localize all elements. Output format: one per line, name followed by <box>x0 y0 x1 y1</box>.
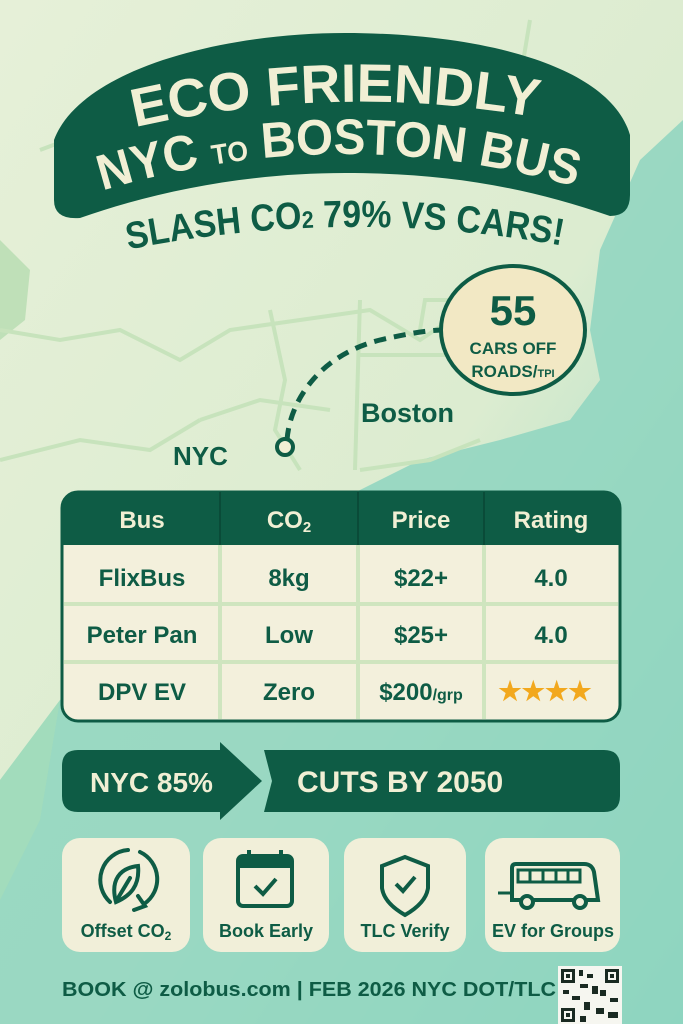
table rows: Zero <box>263 679 315 706</box>
arrow banner: NYC 85% <box>90 767 213 798</box>
title text: ECO FRIENDLY <box>130 64 542 126</box>
card: TLC verify: TLC Verify <box>360 921 450 941</box>
table rows: $22+ <box>394 565 448 592</box>
card: offset CO2: Offset CO <box>81 921 165 941</box>
card: offset CO2: 2 <box>165 929 172 943</box>
card: EV for groups <box>485 838 620 952</box>
arrow banner: CUTS BY 2050 <box>297 766 503 799</box>
title banner <box>54 33 630 218</box>
table rows <box>87 565 568 706</box>
card: TLC verify <box>344 838 466 952</box>
table header: Price <box>392 507 450 534</box>
arrow banner <box>62 742 620 820</box>
table rows: DPV EV <box>98 679 186 706</box>
callout 55 cars <box>441 266 585 394</box>
table header: CO <box>267 507 303 534</box>
comparison table <box>62 492 620 721</box>
table rows: Low <box>265 622 313 649</box>
card: book early <box>203 838 329 952</box>
table rows: 4.0 <box>534 565 568 592</box>
table rows: 8kg <box>268 565 310 592</box>
card: EV for groups: EV for Groups <box>492 921 614 941</box>
QR code <box>558 966 622 1024</box>
label NYC: NYC <box>173 441 228 471</box>
callout 55 cars: 55 <box>490 287 536 334</box>
subtitle: SLASH CO2 79% VS CARS! <box>126 200 564 248</box>
table rows: 4.0 <box>534 622 568 649</box>
table header <box>119 507 588 536</box>
callout 55 cars: CARS OFF <box>470 339 556 358</box>
route dashed line <box>277 330 445 455</box>
table rows: $200/grp <box>379 679 463 706</box>
footer text: BOOK @ zolobus.com | FEB 2026 NYC DOT/TLC <box>62 979 556 1001</box>
table rows: $25+ <box>394 622 448 649</box>
card: offset CO2 <box>62 838 190 952</box>
callout 55 cars: ROADS/TPI <box>471 362 555 381</box>
table header: Rating <box>514 507 588 534</box>
rating stars: ★★★★ <box>498 676 592 706</box>
table header: 2 <box>303 519 311 536</box>
label Boston: Boston <box>361 398 454 428</box>
title banner: NYC TO BOSTON BUS <box>96 119 580 190</box>
table rows: Peter Pan <box>87 622 197 649</box>
table header: Bus <box>119 507 165 534</box>
card: book early: Book Early <box>219 921 313 941</box>
table rows: FlixBus <box>99 565 185 592</box>
